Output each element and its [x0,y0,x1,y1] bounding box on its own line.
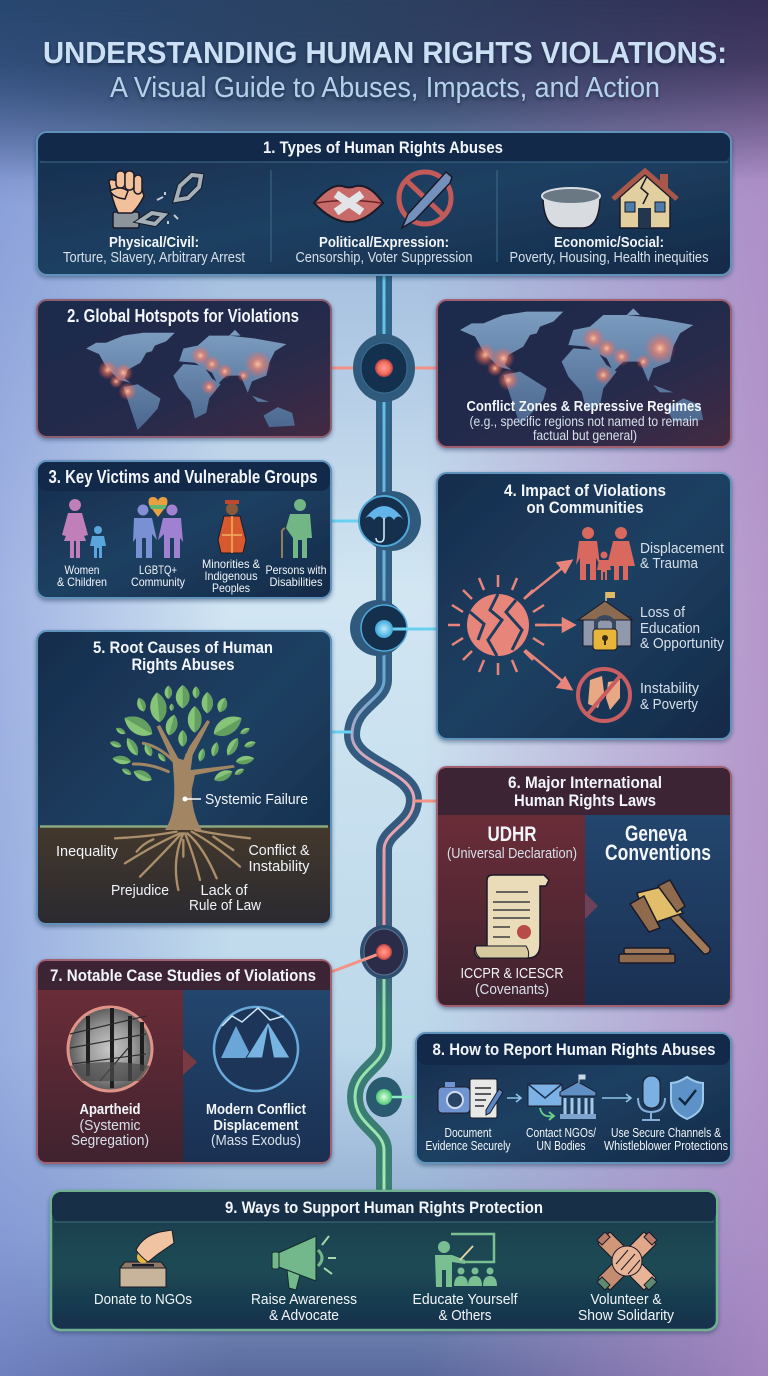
arrow [507,1094,521,1102]
heading 2: 2. Global Hotspots for Violations [67,306,299,326]
group labels: LGBTQ+ [139,563,177,577]
group labels: Indigenous [204,569,258,583]
label: education [640,604,724,652]
node: report connector [366,1077,416,1117]
label: educate: & Others [438,1307,492,1324]
apartheid caption: Apartheid [80,1101,140,1118]
panel 3: key victims [37,461,331,598]
panel 2b: conflict zones map [437,300,731,447]
displacement caption [206,1101,306,1149]
ICCPR caption [460,965,564,998]
icon: LGBTQ+ couple with heart [133,497,183,558]
icon: instability crossed out [578,669,630,721]
ICCPR caption: ICCPR & ICESCR [460,965,564,982]
tree illustration [109,685,257,890]
label: volunteer: Volunteer & [590,1291,662,1308]
root labels: Prejudice [111,882,169,899]
label: education: Education [640,620,700,637]
group labels: Persons with [266,563,326,577]
conflict zones caption: factual but general) [533,427,637,443]
title: UNDERSTANDING HUMAN RIGHTS VIOLATIONS: [43,35,727,70]
group labels: & Children [57,575,107,589]
ICCPR caption: (Covenants) [475,981,549,998]
world map with conflict zones [460,308,703,425]
icon: envelope and institution [528,1075,596,1120]
title [43,35,727,104]
label: educate [412,1291,518,1324]
connector: international laws [414,800,437,802]
report step labels: Use Secure Channels & [611,1125,721,1140]
conflict zones caption: (e.g., specific regions not named to remain [470,413,698,429]
UDHR title: (Universal Declaration) [447,845,577,862]
panel 2: global hotspots map [37,300,331,437]
icon: shattered globe [448,575,546,675]
panel 9: ways to support [51,1191,717,1330]
category: physical/civil: Physical/Civil: [109,234,199,251]
Geneva title: Conventions [605,840,711,865]
heading 4 [504,481,666,517]
label: displacement [640,540,725,572]
label: displacement: Displacement [640,540,725,557]
displacement caption: (Mass Exodus) [211,1132,301,1149]
report step labels [426,1125,728,1153]
root labels [56,842,310,914]
conflict zones caption [466,398,702,443]
icon: gavel [619,880,710,963]
heading 4: on Communities [526,498,644,517]
report step labels: Document [444,1125,492,1140]
apartheid caption [71,1101,149,1149]
root labels: Instability [248,858,310,875]
report step labels: Whistleblower Protections [604,1138,728,1153]
icon: empty bowl [542,188,600,228]
icon: microphone and shield [638,1076,703,1120]
icon: megaphone [272,1236,336,1290]
icon: locked school [578,592,632,650]
arrows to outcomes [525,561,574,689]
label: volunteer [578,1291,674,1324]
heading 6: 6. Major International [508,773,662,792]
panel 8: how to report [416,1033,731,1163]
category: economic/social: Poverty, Housing, Health inequities [510,249,708,266]
panel 7: case studies [37,960,331,1163]
category: political/expression: Censorship, Voter Suppression [296,249,472,266]
apartheid caption: Segregation) [71,1132,149,1149]
panel 5: root causes [37,631,331,924]
UDHR title [447,823,577,862]
icon: woman and child [62,499,106,558]
photo: barbed wire fence [68,1007,152,1091]
panel 1: types of abuses [37,132,731,275]
label: raise awareness: Raise Awareness [251,1291,357,1308]
report step labels: UN Bodies [536,1138,586,1153]
label: displacement: & Trauma [640,555,699,572]
icon: donation box [120,1230,174,1287]
node: impact connector [350,600,437,656]
Geneva title [605,821,711,865]
category: physical/civil: Torture, Slavery, Arbitrary Arrest [63,249,246,266]
heading 6 [508,773,662,810]
label: systemic failure: Systemic Failure [205,791,308,808]
category: political/expression [296,234,472,266]
group labels: Peoples [212,581,250,595]
heading 8: 8. How to Report Human Rights Abuses [432,1040,716,1059]
category: political/expression: Political/Expression: [319,234,449,251]
heading 3: 3. Key Victims and Vulnerable Groups [48,467,318,487]
heading 5: 5. Root Causes of Human [93,638,273,657]
Geneva title: Geneva [625,821,688,846]
label: education: Loss of [640,604,686,621]
icon: displaced family [576,527,635,580]
arrow [602,1094,631,1102]
heading 9: 9. Ways to Support Human Rights Protection [225,1198,543,1217]
node: umbrella [331,491,421,551]
group labels: Minorities & [202,557,260,571]
group labels: Disabilities [270,575,322,589]
icon: indigenous person [218,500,246,553]
root labels: Rule of Law [189,897,261,914]
displacement caption: Modern Conflict [206,1101,306,1118]
label: instability [640,680,699,713]
icon: teacher and students [435,1234,497,1287]
connector: root causes [331,730,352,734]
node: case studies connector [331,925,408,979]
icon: cracked house [613,171,677,228]
category: physical/civil [63,234,246,266]
heading 5 [93,638,273,674]
icon: fist and broken chain [109,171,201,228]
group labels: Community [131,575,185,589]
group labels [57,557,326,595]
heading 1: 1. Types of Human Rights Abuses [263,138,503,157]
label: donate: Donate to NGOs [94,1291,192,1308]
heading 5: Rights Abuses [132,655,234,674]
label: educate: Educate Yourself [412,1291,518,1308]
icon: scroll [474,875,549,958]
world map with hotspots [86,330,295,430]
category: economic/social: Economic/Social: [554,234,664,251]
icon: person with cane [282,499,312,558]
title: A Visual Guide to Abuses, Impacts, and Action [110,72,660,104]
icon: camera and notes [438,1079,503,1118]
heading 7: 7. Notable Case Studies of Violations [50,966,316,985]
label: raise awareness: & Advocate [269,1307,339,1324]
apartheid caption: (Systemic [80,1117,141,1134]
label: volunteer: Show Solidarity [578,1307,674,1324]
node: hotspots connector [331,334,437,402]
root labels: Lack of [200,882,248,899]
icon: refugee tents [214,1007,298,1091]
panel 6: international laws [437,767,731,1006]
heading 4: 4. Impact of Violations [504,481,666,500]
label: instability: Instability [640,680,699,697]
displacement caption: Displacement [214,1117,298,1134]
icon: crossed-out pen [399,172,452,228]
report step labels: Evidence Securely [426,1138,511,1153]
label: raise awareness [251,1291,357,1324]
heading 6: Human Rights Laws [514,791,656,810]
icon: taped lips [314,186,383,222]
panel 4: impact on communities [437,473,731,739]
timeline spine [352,275,414,1191]
label: education: & Opportunity [640,635,724,652]
label: instability: & Poverty [640,696,698,713]
group labels: Women [64,563,100,577]
root labels: Inequality [56,843,118,860]
conflict zones caption: Conflict Zones & Repressive Regimes [466,398,702,415]
UDHR title: UDHR [488,823,536,846]
category: economic/social [510,234,708,266]
report step labels: Contact NGOs/ [526,1125,596,1140]
icon: joined hands [597,1232,657,1290]
root labels: Conflict & [248,842,310,859]
